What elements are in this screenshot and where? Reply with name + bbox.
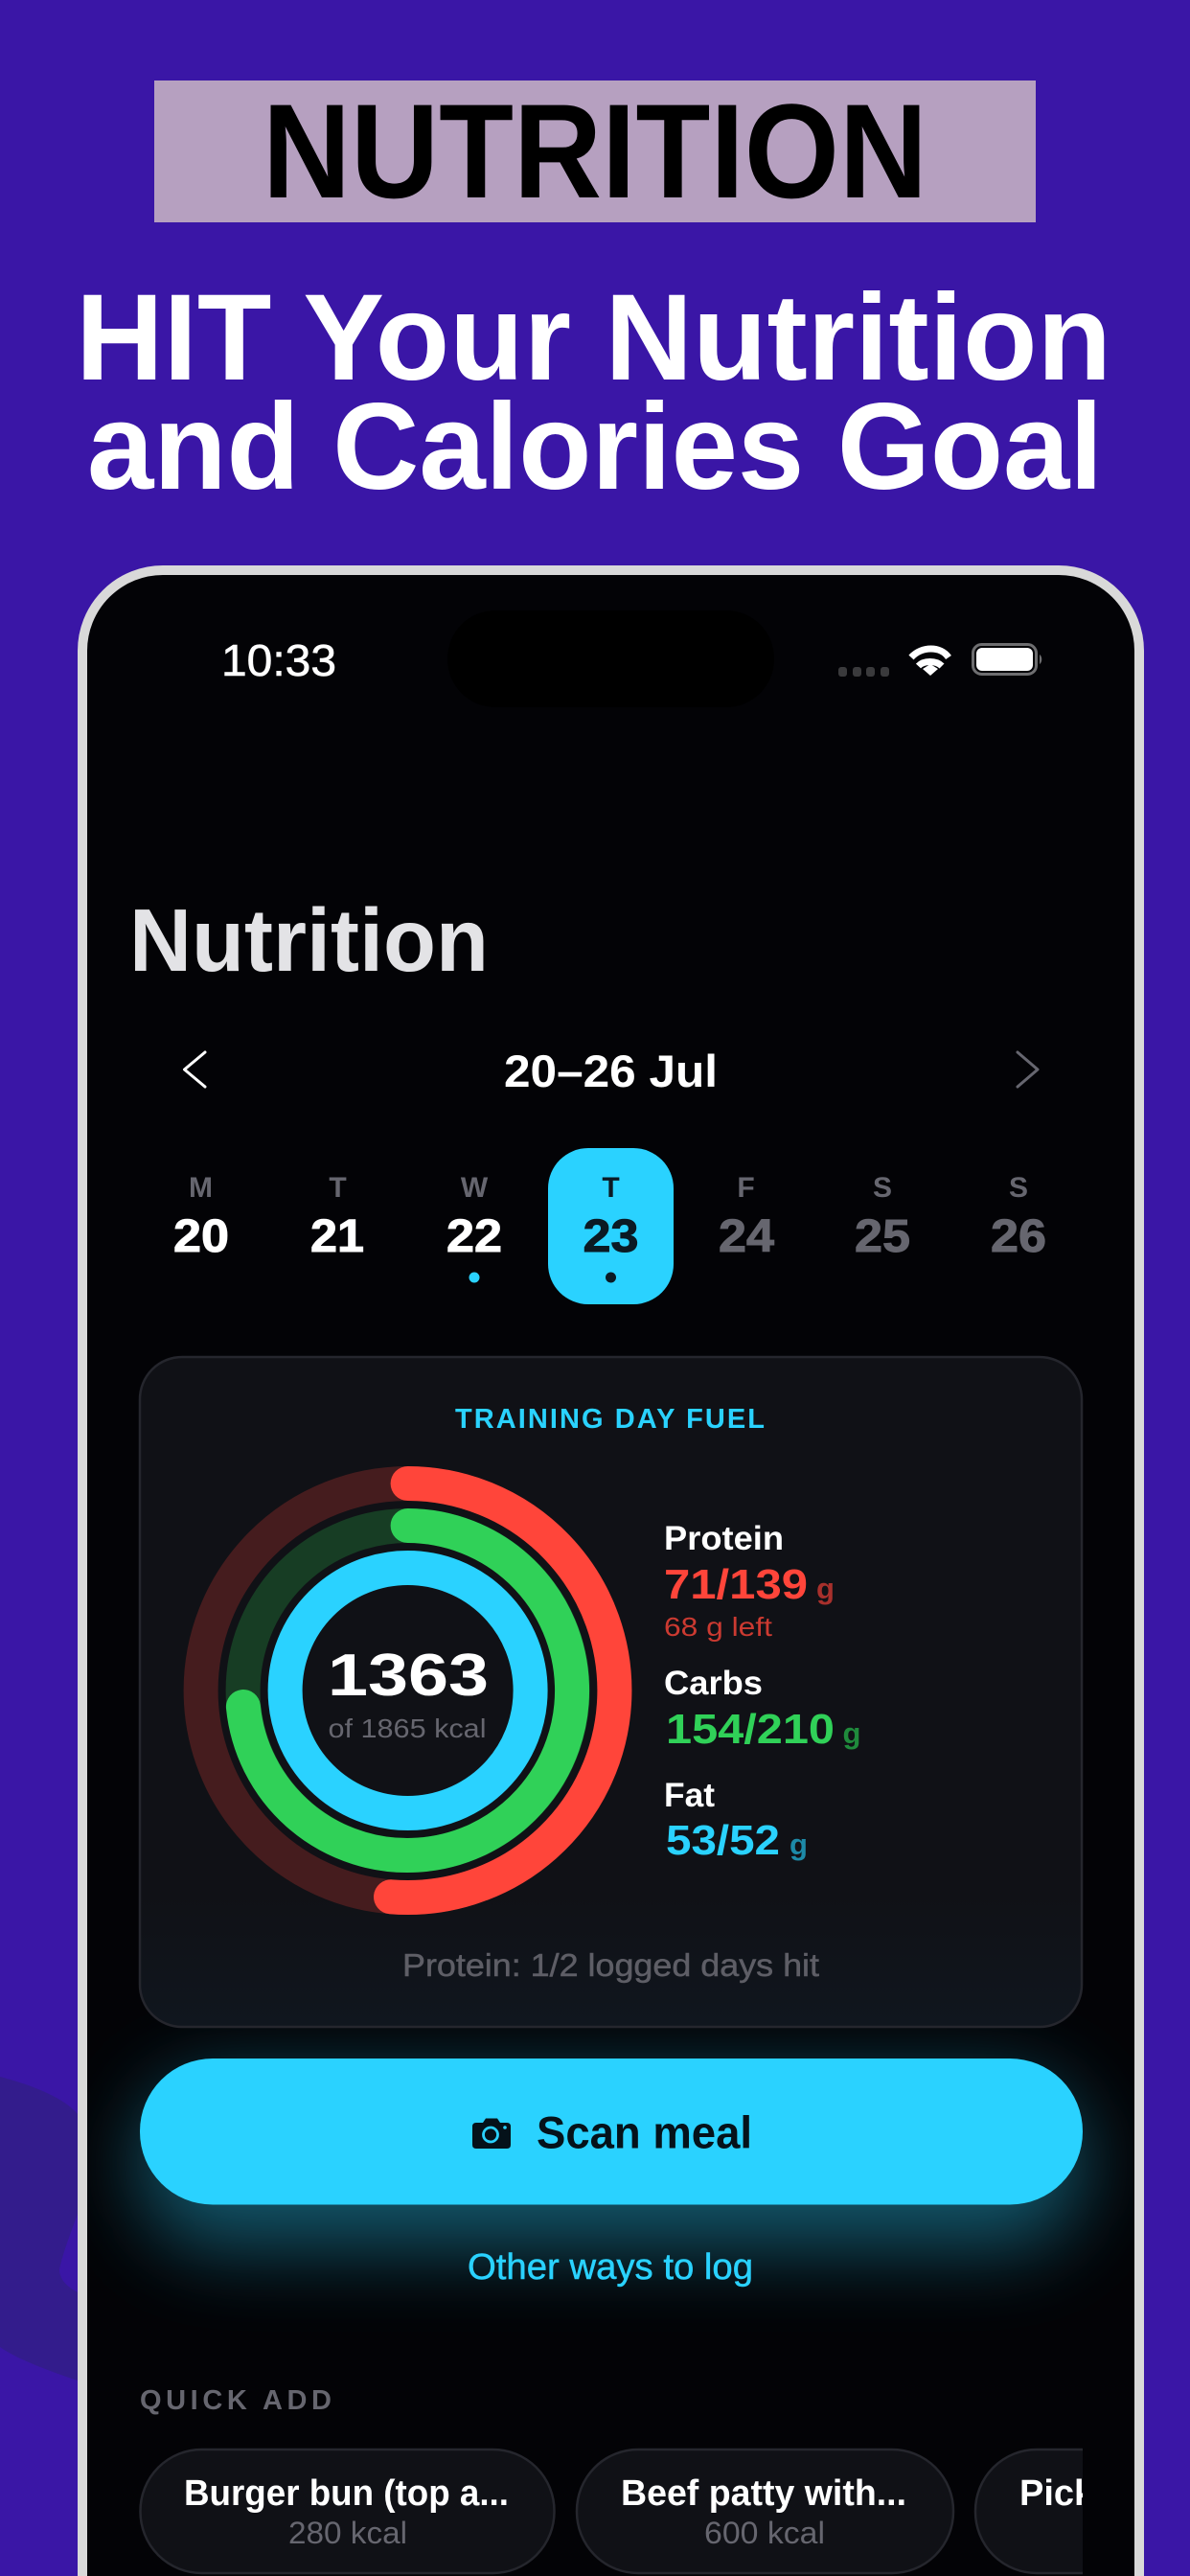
icon: camera [472, 2118, 511, 2149]
phone screen content [129, 610, 1190, 2573]
day numbers: 24 [719, 1211, 774, 1262]
status: signal dots [838, 667, 889, 677]
secondary link: Other ways to log [468, 2247, 753, 2288]
weekday letters [191, 1177, 1027, 1198]
day numbers [174, 1219, 1045, 1253]
panel: training day fuel [140, 1357, 1082, 2027]
weekday letters: T [329, 1172, 347, 1204]
logged day dots [469, 1273, 616, 1282]
icon: next week chevron [1018, 1052, 1038, 1087]
week range: 20–26 Jul [504, 1046, 718, 1096]
macro ring chart [201, 1484, 615, 1898]
selected day highlight [548, 1148, 674, 1304]
weekday letters: W [461, 1172, 489, 1204]
macro: fat [666, 1782, 806, 1861]
week day selector [173, 1148, 1046, 1304]
button glow [140, 2080, 1083, 2247]
weekday letters: T [602, 1172, 620, 1204]
icon: battery [973, 644, 1041, 675]
chip: beef patty: Beef patty with... [621, 2473, 906, 2514]
decorative background blob [0, 2077, 78, 2380]
macro: protein: g [816, 1572, 835, 1605]
chip: burger bun [140, 2450, 554, 2573]
headline [76, 269, 1111, 516]
chip: beef patty: 600 kcal [704, 2516, 825, 2550]
macro: protein: 68 g left [664, 1612, 772, 1642]
day numbers: 23 [583, 1211, 638, 1262]
day numbers: 22 [446, 1211, 502, 1262]
quick add chips [140, 2450, 1190, 2573]
phone frame [82, 570, 1139, 2576]
headline: and Calories Goal [87, 379, 1103, 516]
icon: wifi [911, 649, 949, 676]
screen title: Nutrition [129, 890, 489, 990]
macro: carbs: Carbs [664, 1665, 763, 1702]
macro: protein: 71/139 [664, 1561, 808, 1608]
icon: previous week chevron [184, 1052, 205, 1087]
panel heading: TRAINING DAY FUEL [455, 1404, 765, 1435]
ring centre calories [330, 1653, 487, 1738]
scan meal button [140, 2058, 1083, 2204]
category label: NUTRITION: NUTRITION [263, 76, 927, 226]
chip: beef patty [577, 2450, 953, 2573]
status bar time: 10:33 [221, 635, 336, 685]
macro: fat: g [790, 1828, 808, 1861]
weekday letters: S [873, 1172, 892, 1204]
dynamic island [447, 610, 774, 707]
ring centre calories: of 1865 kcal [328, 1714, 487, 1743]
macro: fat: Fat [664, 1777, 715, 1814]
chip: pickles (clipped): Pickles [1019, 2473, 1145, 2514]
chip: burger bun: 280 kcal [288, 2516, 407, 2550]
weekday letters: S [1009, 1172, 1028, 1204]
day numbers: 26 [991, 1211, 1046, 1262]
macro: protein [664, 1520, 835, 1642]
weekday letters: M [189, 1172, 213, 1204]
macro: fat: 53/52 [666, 1817, 780, 1864]
chip: burger bun: Burger bun (top a... [184, 2473, 509, 2514]
quick add heading: QUICK ADD [140, 2385, 332, 2416]
day numbers: 25 [855, 1211, 910, 1262]
macro: carbs [665, 1669, 858, 1750]
weekday letters: F [737, 1172, 755, 1204]
day numbers: 21 [310, 1211, 364, 1262]
ring centre calories: 1363 [328, 1643, 489, 1709]
chip: pickles (clipped) [973, 2448, 1083, 2574]
macro: carbs: g [843, 1716, 860, 1750]
day numbers: 20 [173, 1211, 229, 1262]
macro: protein: Protein [664, 1520, 784, 1557]
headline: HIT Your Nutrition [76, 269, 1111, 406]
panel footnote: Protein: 1/2 logged days hit [402, 1947, 819, 1983]
button label: Scan meal [537, 2106, 752, 2158]
macro: carbs: 154/210 [666, 1706, 835, 1753]
